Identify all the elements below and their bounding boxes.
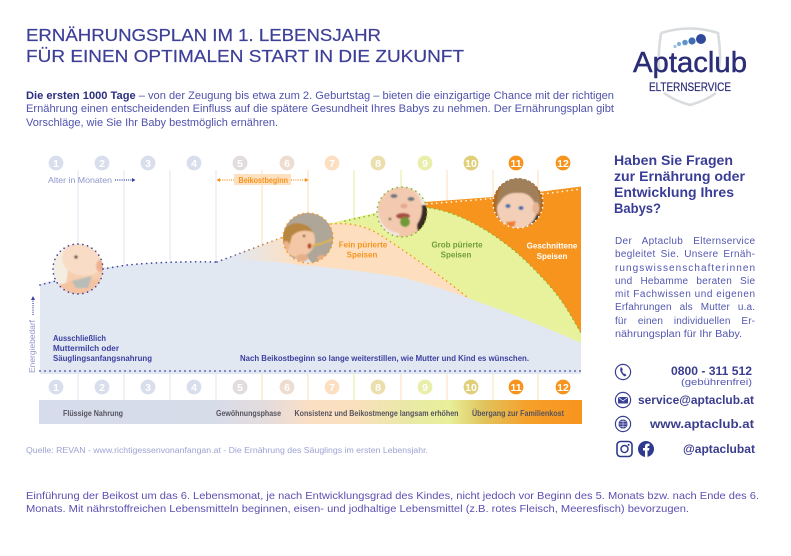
icon: facebook [638,441,654,457]
icon: web [615,416,631,432]
source line: Quelle: REVAN - www.richtigessenvonanfangan.at - Die Ernährung des Säuglings im ersten Lebensjahr. [26,445,428,455]
area: blue, milk [40,261,581,374]
logo: Aptaclub Elternservice [633,28,747,105]
milk feeding text: Muttermilch oder [53,344,119,353]
month markers bottom: 8 [375,382,381,394]
dotted curves [40,189,581,371]
month markers bottom: 6 [284,382,290,394]
food stage labels: Speisen [537,252,567,261]
month markers bottom: 11 [510,382,522,394]
phase band: Konsistenz und Beikostmenge langsam erhöhen [294,409,459,418]
photo: breastfeeding baby [52,243,104,295]
title: ERNÄHRUNGSPLAN IM 1. LEBENSJAHR [26,25,381,45]
label: age in months with arrow: Alter in Monaten [48,175,112,185]
phase band: Gewöhnungsphase [216,409,281,418]
month markers top: 4 [191,158,197,170]
food stage labels: Grob pürierte [431,240,483,250]
month markers top: 2 [99,158,105,170]
month markers top: 8 [375,158,381,170]
month markers top: 1 [53,158,59,170]
contact: phone: (gebührenfrei) [681,377,752,388]
milk feeding text: Säuglingsanfangsnahrung [53,354,152,363]
label: start of complementary food [216,174,308,185]
area: peach, fine puree [217,224,492,345]
milk feeding text: Nach Beikostbeginn so lange weiterstillen, wie Mutter und Kind es wünschen. [240,354,529,363]
month markers bottom: 4 [191,382,197,394]
food stage labels: Fein pürierte [339,240,388,250]
logo: Aptaclub Elternservice: ELTERNSERVICE [649,82,731,94]
area: green, coarse puree [318,206,581,350]
title: FÜR EINEN OPTIMALEN START IN DIE ZUKUNFT [26,46,464,66]
contact: phone [671,366,752,388]
food stage labels: Speisen [441,250,471,260]
milk feeding text: Ausschließlich [53,334,106,343]
label: start of complementary food: Beikostbeginn [238,176,288,185]
sidebar heading [614,152,746,216]
month grid lines [78,170,538,400]
intro text: Vorschläge, wie Sie Ihr Baby bestmöglich ernähren. [26,117,278,129]
phase band: Flüssige Nahrung [63,409,123,418]
sidebar heading: Haben Sie Fragen [614,152,733,168]
sidebar heading: Babys? [614,200,661,216]
month markers bottom: 2 [99,382,105,394]
month markers top [49,156,570,170]
sidebar paragraph: nährungsplan für Ihr Baby. [615,329,742,340]
sidebar paragraph: Erfahrungen als Mutter u.a. [615,302,755,313]
footer text: Monats. Mit nährstoffreichen Lebensmitteln beginnen, eisen- und jodhaltige Lebensmittel (z.B. rotes Fleisch, Meeresfisch) bevorzugen. [26,504,689,515]
contact: social handle: @aptaclubat [683,444,755,456]
month markers bottom: 10 [465,382,477,394]
month markers top: 12 [557,158,569,170]
sidebar paragraph: begleitet Sie. Unsere Ernäh- [615,249,755,260]
intro text: Die ersten 1000 Tage – von der Zeugung bis etwa zum 2. Geburtstag – bieten die einzigartige Chance mit der richtigen [26,90,614,102]
food stage labels: Geschnittene [527,242,578,250]
month markers bottom: 7 [329,382,335,394]
month markers top: 7 [329,158,335,170]
icon: instagram [617,442,632,456]
sidebar paragraph: Der Aptaclub Elternservice [615,236,755,247]
logo: Aptaclub Elternservice: Aptaclub [633,47,747,79]
month markers top: 3 [145,158,151,170]
month markers top: 6 [284,158,290,170]
contact: phone: 0800 - 311 512 [671,366,752,378]
month markers top: 9 [422,158,428,170]
phase band: Übergang zur Familienkost [472,409,564,418]
month markers bottom: 12 [557,382,569,394]
footer text: Einführung der Beikost um das 6. Lebensmonat, je nach Entwicklungsgrad des Kindes, nicht jedoch vor Beginn des 5. Monats bzw. nach Ende des 6. [26,491,759,502]
sidebar paragraph: für einen individuellen Er- [615,316,755,327]
intro text: Ernährung einen entscheidenden Einfluss auf die spätere Gesundheit Ihres Babys zu nehmen. Der Ernährungsplan gibt [26,103,614,115]
month markers bottom [49,380,570,394]
month markers bottom: 5 [237,382,243,394]
month markers top: 5 [237,158,243,170]
phase band [39,400,582,424]
intro text [26,90,614,129]
food stage labels: Speisen [347,250,377,260]
photo: baby with spoon [282,212,334,264]
footer text [26,491,759,515]
sidebar paragraph: und Hebamme beraten Sie [615,276,755,287]
sidebar heading: zur Ernährung oder [614,168,746,184]
month markers bottom: 1 [53,382,59,394]
axis label: energy need: Energiebedarf [27,319,37,373]
axis label: energy need [27,296,37,373]
title [26,25,464,66]
sidebar paragraph: rungswissenschafterinnen [615,263,755,274]
icon: mail [615,392,631,408]
contact: e-mail: service@aptaclub.at [638,395,754,407]
milk feeding text [53,334,529,363]
month markers bottom: 9 [422,382,428,394]
month markers top: 11 [510,158,522,170]
icon: phone [615,364,631,380]
food stage labels [339,240,578,261]
area: orange, cut food [425,186,581,345]
photo: baby eating carrot [492,178,544,229]
sidebar paragraph [615,236,755,340]
month markers bottom: 3 [145,382,151,394]
month markers top: 10 [465,158,477,170]
sidebar paragraph: mit Fachwissen und eigenen [615,289,755,300]
chart: energy curve by month [40,170,581,400]
photo: baby eating broccoli [376,186,428,238]
sidebar heading: Entwicklung Ihres [614,184,734,200]
contact: website: www.aptaclub.at [649,419,754,431]
